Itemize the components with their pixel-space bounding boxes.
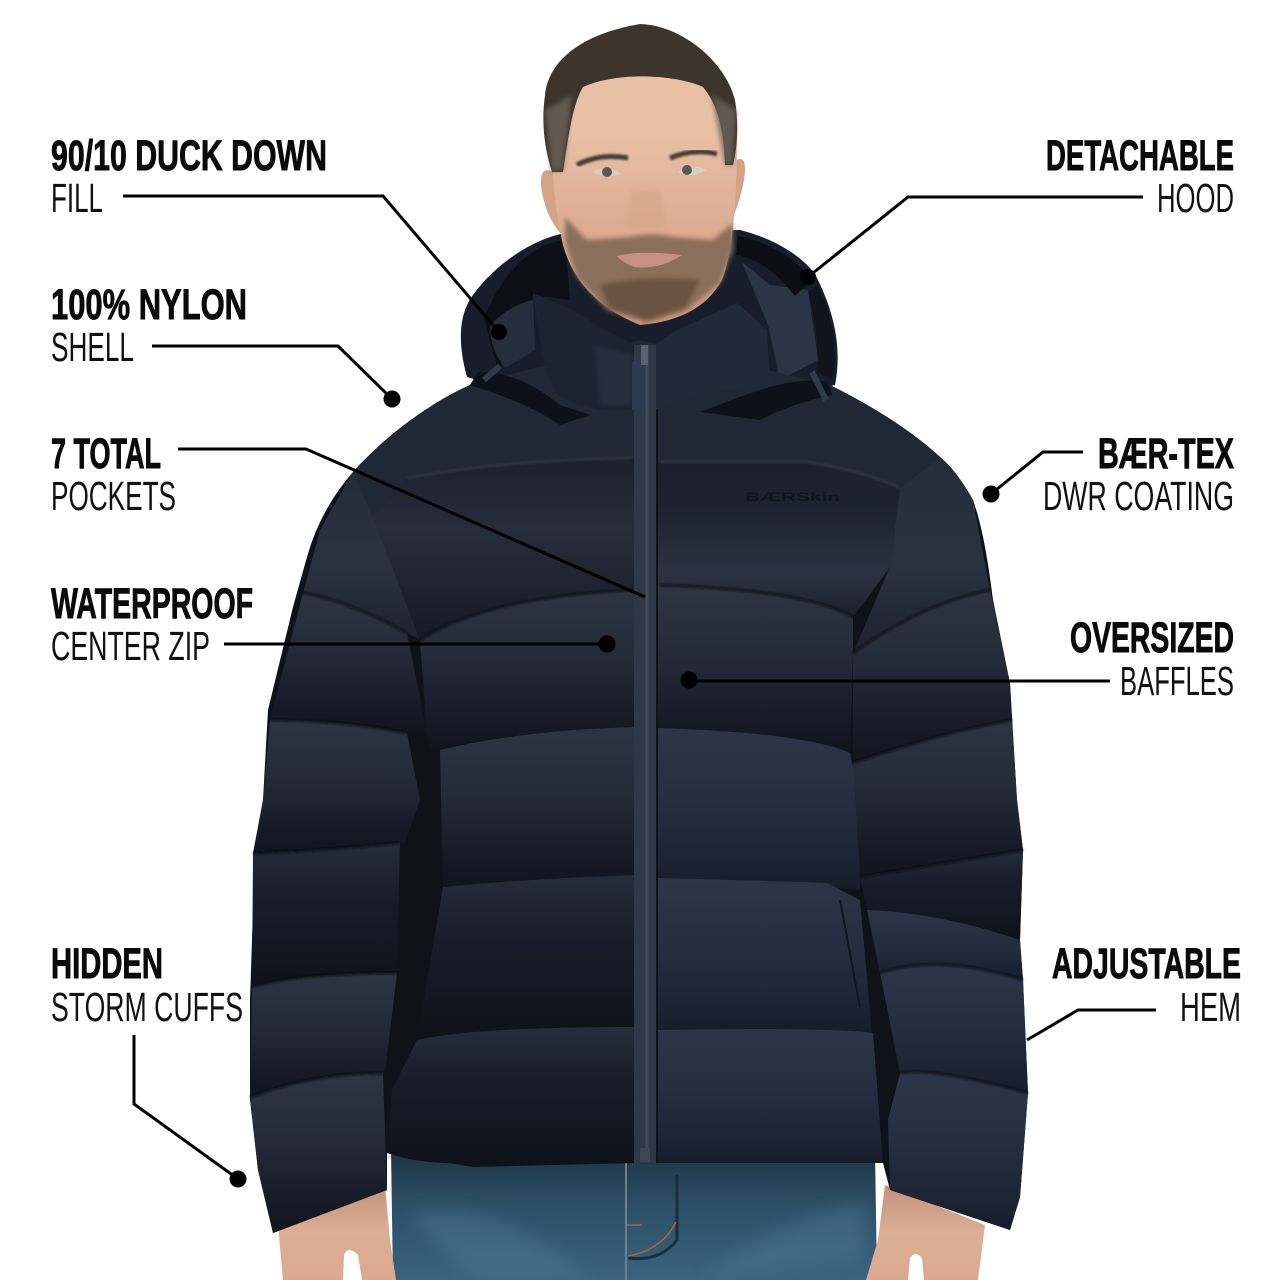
- jeans: [391, 1150, 877, 1280]
- label: waterproof center zip: [51, 580, 616, 669]
- label: 7 total pockets: 7 TOTAL: [51, 430, 161, 478]
- left hand: [278, 1185, 396, 1280]
- jacket body: [250, 340, 1028, 1233]
- center zip placket: [632, 345, 656, 1163]
- label: baer-tex dwr coating: [982, 430, 1234, 519]
- jacket silhouette: [250, 340, 1028, 1233]
- label: 7 total pockets: POCKETS: [51, 473, 176, 519]
- label: hidden storm cuffs: STORM CUFFS: [51, 984, 243, 1030]
- nose: [625, 190, 668, 230]
- beard: [565, 217, 733, 322]
- right hand: [866, 1185, 985, 1280]
- drawcords: [484, 366, 826, 400]
- label: 90/10 duck down fill: [51, 132, 507, 340]
- label: oversized baffles: [680, 614, 1234, 704]
- right torso baffles: [658, 462, 900, 1163]
- figure: man wearing puffer jacket: [250, 24, 1028, 1280]
- chest logo: BÆRSkin: [745, 490, 840, 504]
- collar: [470, 293, 832, 425]
- mouth: [617, 253, 682, 268]
- eyebrows: [577, 152, 717, 165]
- label: 90/10 duck down fill: FILL: [51, 175, 103, 221]
- left sleeve baffles: [250, 472, 427, 1233]
- head: [541, 24, 745, 325]
- label: 100% nylon shell: [51, 281, 400, 408]
- label: 7 total pockets: [51, 430, 645, 597]
- label: 100% nylon shell: SHELL: [51, 324, 134, 370]
- right sleeve baffles: [853, 457, 1028, 1230]
- label: adjustable hem: HEM: [1180, 984, 1241, 1030]
- left torso baffles: [373, 458, 636, 1163]
- label: waterproof center zip: WATERPROOF: [51, 580, 253, 628]
- label: 90/10 duck down fill: 90/10 DUCK DOWN: [51, 132, 327, 180]
- hood: [461, 230, 838, 430]
- grey temples: [545, 95, 736, 172]
- face: [552, 50, 737, 325]
- neck: [572, 250, 730, 345]
- label: waterproof center zip: CENTER ZIP: [51, 623, 210, 669]
- label: detachable hood: [800, 132, 1234, 285]
- seam lines: [250, 458, 1028, 1097]
- label: adjustable hem: [1027, 940, 1241, 1040]
- label: hidden storm cuffs: HIDDEN: [51, 940, 163, 988]
- hair: [543, 24, 737, 172]
- ears: [541, 159, 745, 235]
- label: detachable hood: HOOD: [1157, 175, 1234, 221]
- label: 100% nylon shell: 100% NYLON: [51, 281, 247, 329]
- chin shading: [600, 278, 700, 320]
- eyes: [592, 165, 706, 177]
- yoke: [353, 340, 940, 517]
- label: hidden storm cuffs: [51, 940, 246, 1188]
